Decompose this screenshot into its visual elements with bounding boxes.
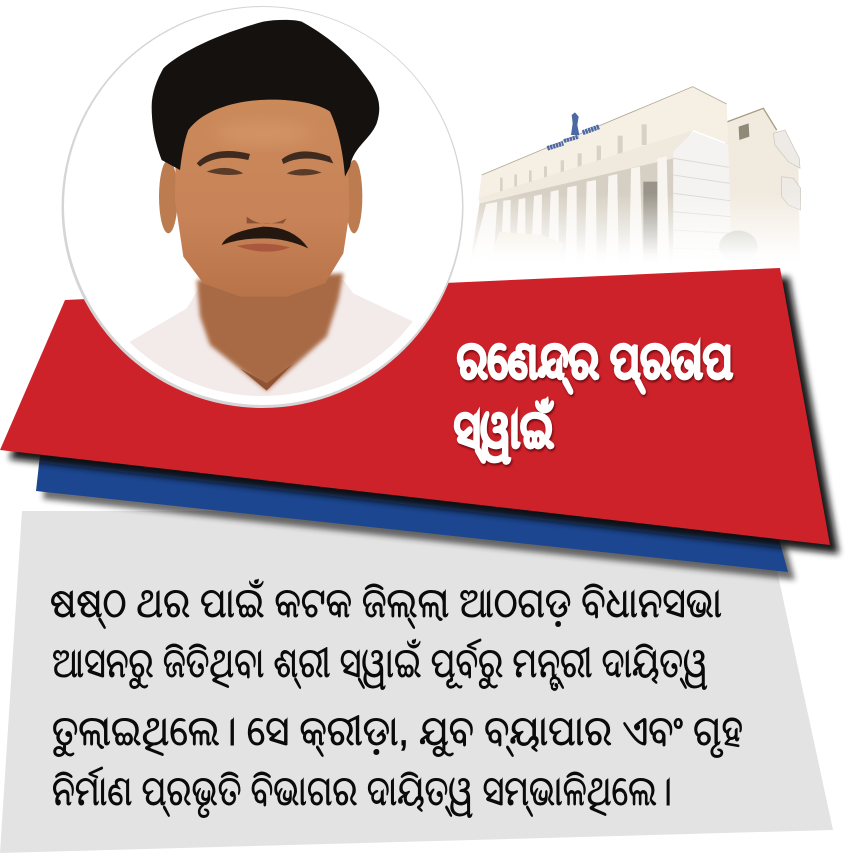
title line 1: ରଣେନ୍ଦ୍ର ପ୍ରତାପ: [457, 332, 733, 393]
banner shape: [0, 268, 830, 545]
right eye: [287, 169, 322, 176]
right wing: [725, 108, 800, 263]
man portrait: [130, 20, 412, 396]
banner shadow: [9, 277, 839, 554]
ribbon shadow: [43, 463, 795, 580]
forehead highlight: [228, 126, 298, 142]
balconies: [773, 130, 800, 168]
right eyebrow: [282, 151, 333, 164]
title line 2: ସ୍ୱାଇଁ: [454, 398, 554, 464]
collar fold: [240, 363, 293, 391]
shirt: [130, 280, 412, 396]
window grille: [739, 123, 749, 140]
circle frame: [62, 6, 464, 408]
body line 3: ତୁଲାଇଥିଲେ। ସେ କ୍ରୀଡ଼ା, ଯୁବ ବ୍ୟାପାର ଏବଂ ଗୃହ: [52, 707, 743, 758]
corner block: [673, 132, 732, 263]
portrait circle: [62, 6, 464, 433]
palm: [719, 231, 758, 263]
red banner: [0, 268, 839, 554]
porch: [490, 232, 563, 263]
fade to white: [460, 193, 820, 265]
facade windows: [500, 124, 647, 192]
emblem sign: [547, 112, 599, 148]
face: [175, 93, 349, 297]
moustache: [222, 227, 308, 248]
lips: [237, 244, 290, 252]
grey text panel: [0, 511, 833, 853]
dark window: [643, 182, 657, 262]
building illustration: [460, 87, 820, 265]
nose: [247, 217, 287, 224]
body line 1: ଷଷ୍ଠ ଥର ପାଇଁ କଟକ ଜିଲ୍ଲା ଆଠଗଡ଼ ବିଧାନସଭା: [50, 579, 722, 629]
hair: [152, 20, 379, 177]
left eye: [207, 168, 243, 175]
blue ribbon: [36, 455, 795, 580]
upper facade: [478, 87, 728, 199]
ears: [159, 160, 178, 233]
body text: [50, 579, 743, 818]
body line 4: ନିର୍ମାଣ ପ୍ରଭୃତି ବିଭାଗର ଦାୟିତ୍ୱ ସମ୍ଭାଳିଥିଲେ।: [52, 767, 672, 818]
columns: [471, 156, 669, 263]
ground floor recess: [470, 154, 673, 263]
neck: [197, 273, 343, 391]
left eyebrow: [197, 151, 250, 167]
banner title: name: [454, 332, 733, 464]
